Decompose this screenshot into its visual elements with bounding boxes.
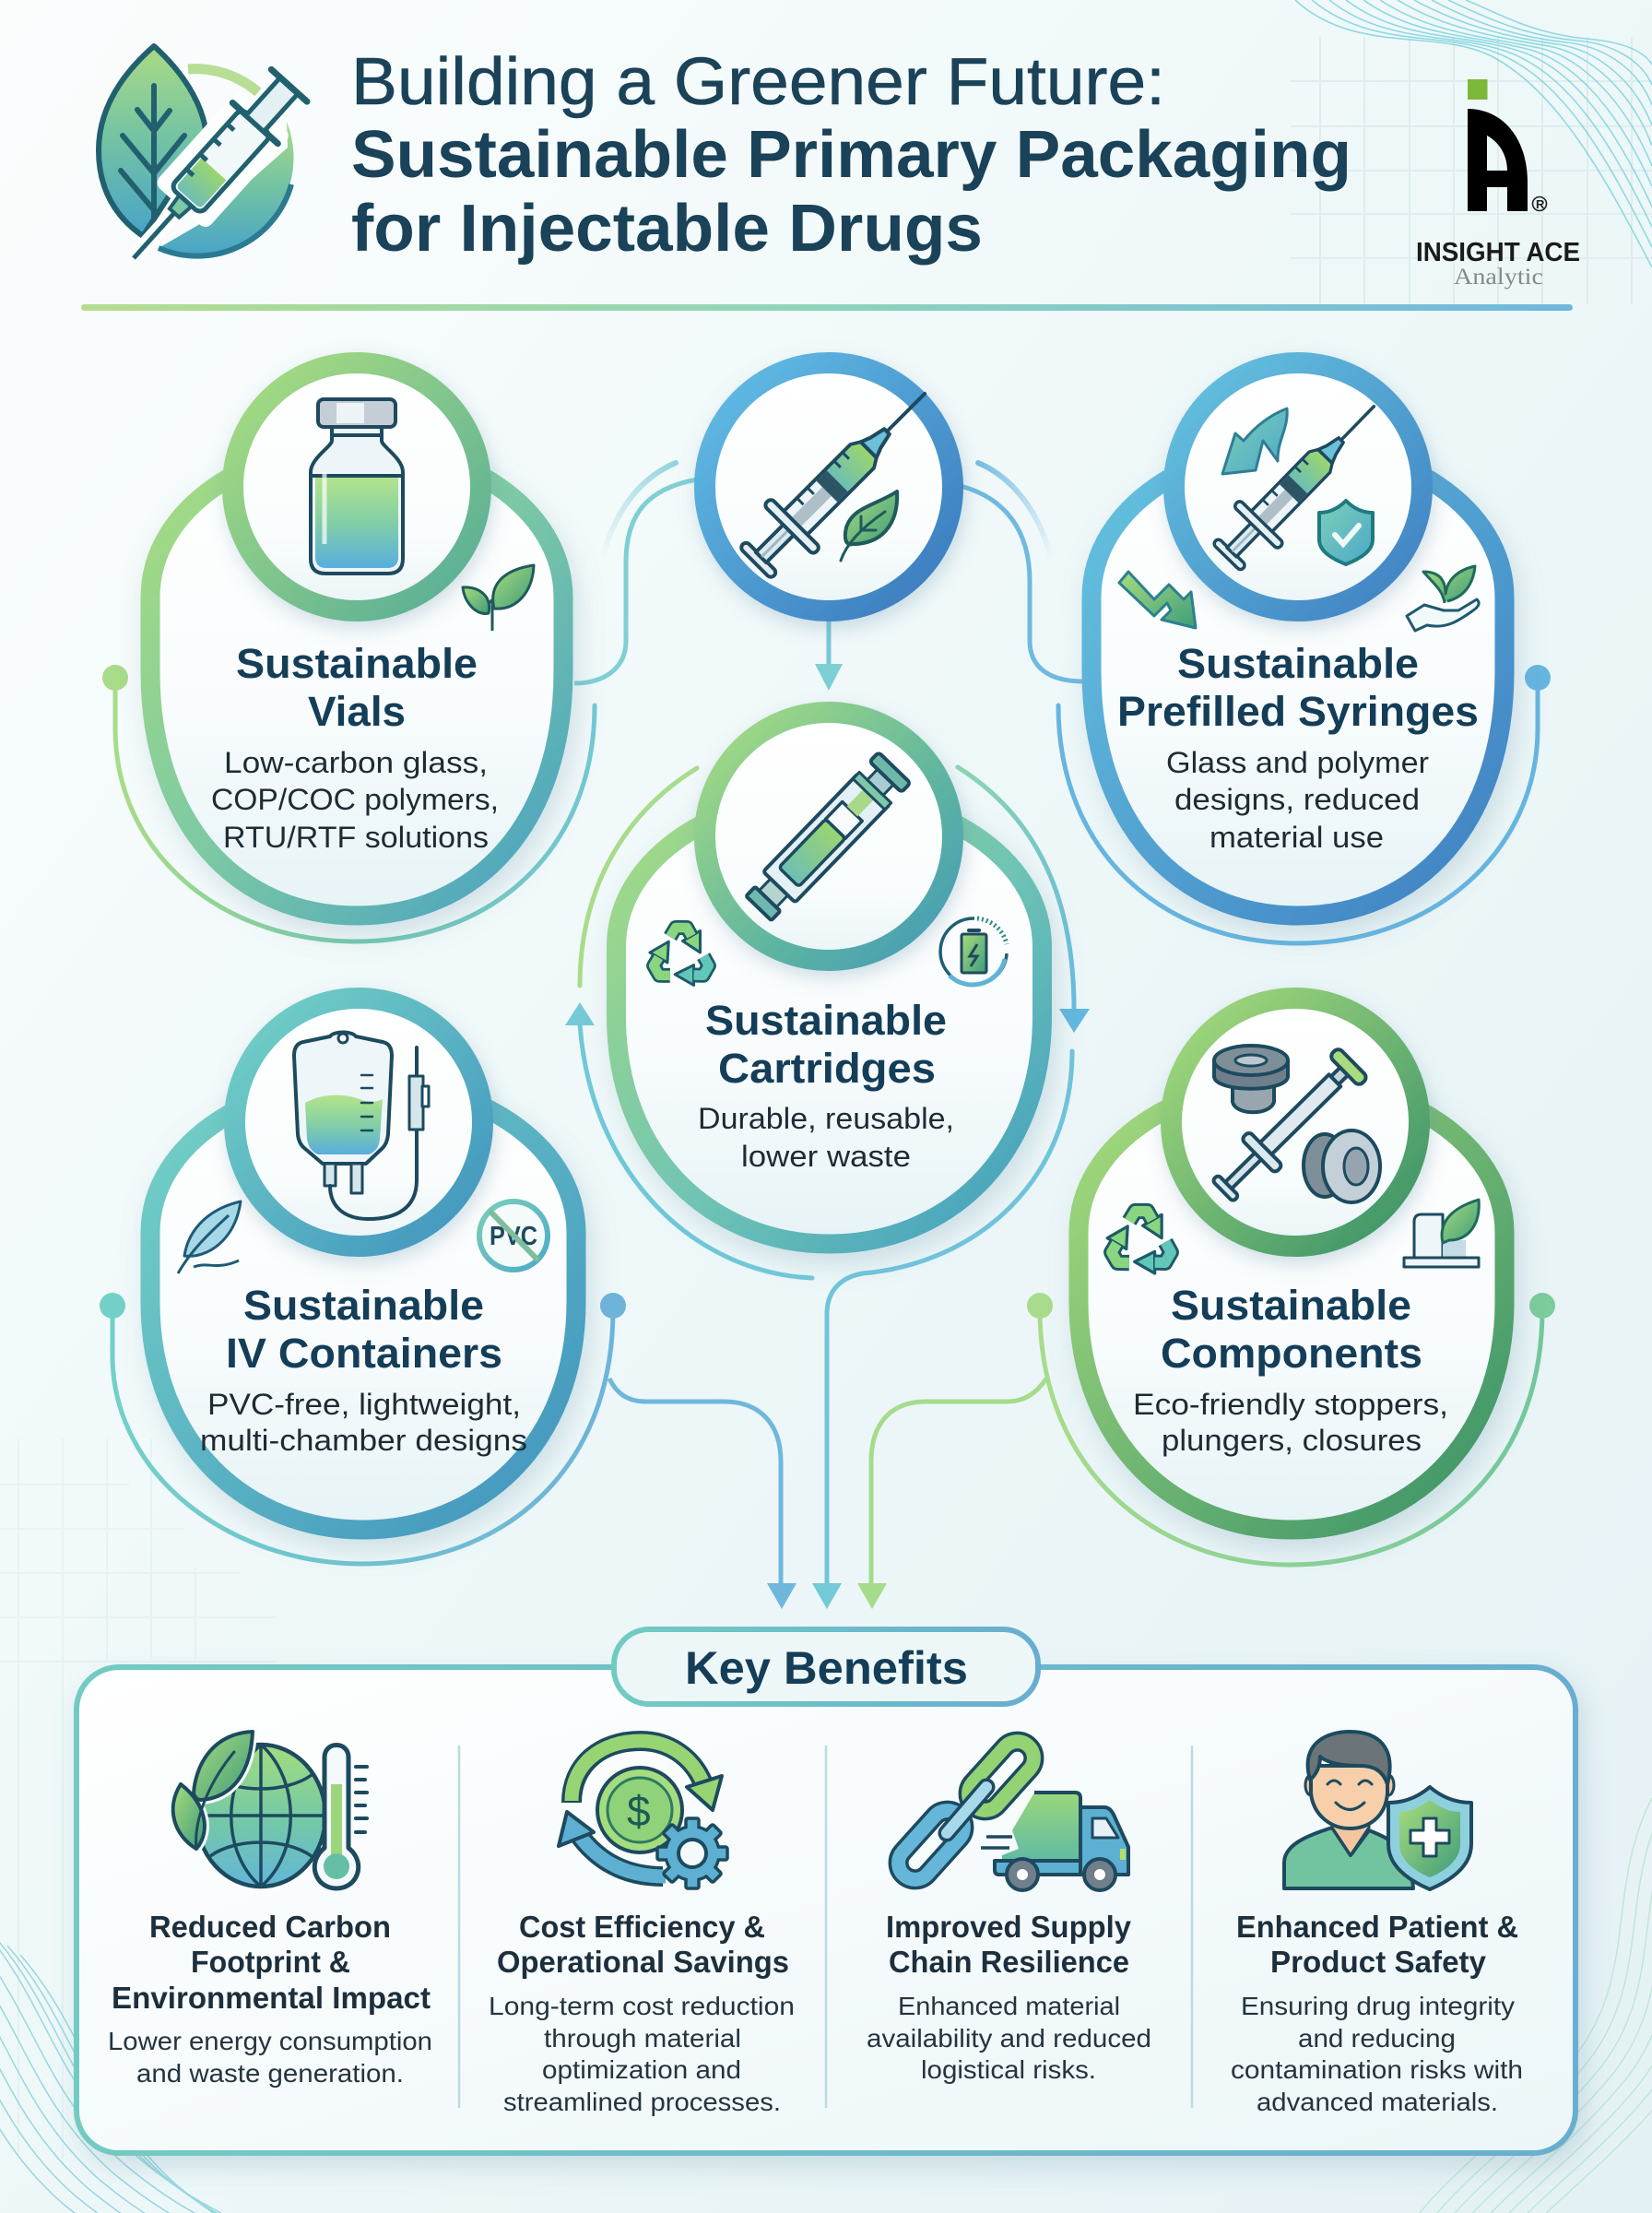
icon: vial bbox=[311, 399, 403, 574]
icon: feather bbox=[178, 1201, 241, 1273]
text: patient safety: contamination risks with bbox=[1231, 2055, 1523, 2084]
syringe bbox=[111, 65, 312, 278]
text: cost efficiency: streamlined processes. bbox=[503, 2088, 781, 2116]
card shape bbox=[1092, 444, 1504, 916]
text: cost efficiency bbox=[489, 1910, 795, 2116]
outer arc: prefilled syringes bbox=[1058, 665, 1551, 943]
text: reduced carbon footprint: Environmental Impact bbox=[112, 1981, 431, 2015]
icon circle bbox=[1171, 998, 1420, 1247]
title bbox=[351, 45, 1351, 266]
bottom-right wave lines bbox=[1420, 1798, 1652, 2213]
icon circle bbox=[704, 363, 953, 610]
text: cartridges: Sustainable bbox=[705, 997, 947, 1044]
text: reduced carbon footprint: and waste generation. bbox=[136, 2059, 404, 2088]
text: supply chain bbox=[867, 1910, 1151, 2084]
text: IV containers: IV Containers bbox=[226, 1330, 502, 1377]
icon: round stopper bbox=[1304, 1130, 1380, 1202]
card shape bbox=[616, 794, 1042, 1244]
text: prefilled syringes: designs, reduced bbox=[1174, 783, 1420, 816]
icon: down trend arrow bbox=[1119, 572, 1196, 628]
arrow: upper right around cartridges bbox=[958, 767, 1090, 1033]
connector: top syringe to vials bbox=[574, 463, 697, 683]
text: patient safety bbox=[1231, 1910, 1523, 2116]
crescent behind syringe bbox=[159, 122, 293, 255]
text: components: plungers, closures bbox=[1162, 1424, 1422, 1457]
text: reduced carbon footprint bbox=[108, 1910, 432, 2088]
text: cartridges: Cartridges bbox=[718, 1045, 936, 1092]
arrow: components to key benefits bbox=[857, 1379, 1046, 1609]
text: supply chain: logistical risks. bbox=[921, 2055, 1096, 2084]
text: patient safety: advanced materials. bbox=[1257, 2088, 1498, 2116]
text: reduced carbon footprint: Lower energy consumption bbox=[108, 2027, 432, 2055]
outer arc: components bbox=[1027, 1293, 1555, 1565]
panel: sustainable IV containers bbox=[150, 998, 576, 1530]
text: prefilled syringes bbox=[1117, 640, 1479, 854]
icon: chain links and truck bbox=[891, 1734, 1128, 1890]
bottom-left wave lines bbox=[0, 1927, 260, 2213]
column dividers bbox=[459, 1746, 1192, 2108]
text: cost efficiency: optimization and bbox=[542, 2055, 741, 2084]
icon: cost cycle, coin and gear: $ bbox=[627, 1787, 651, 1835]
title: Sustainable Primary Packaging bbox=[351, 118, 1351, 192]
title: Building a Greener Future: bbox=[351, 45, 1165, 119]
text: reduced carbon footprint: Footprint & bbox=[191, 1945, 350, 1979]
panel: sustainable prefilled syringes bbox=[1092, 363, 1504, 916]
text: components bbox=[1133, 1282, 1448, 1457]
text: vials: Sustainable bbox=[236, 640, 478, 687]
faint grid bottom left bbox=[0, 1438, 277, 2158]
text: reduced carbon footprint: Reduced Carbon bbox=[149, 1910, 391, 1944]
icon circle bbox=[704, 712, 953, 961]
icon: no PVC bbox=[479, 1201, 548, 1270]
icon: cost cycle, coin and gear bbox=[559, 1741, 727, 1888]
text: vials bbox=[211, 640, 499, 854]
icon: shield bbox=[1319, 501, 1373, 564]
text: supply chain: Enhanced material bbox=[898, 1992, 1120, 2020]
arc: upper left around cartridges bbox=[580, 768, 697, 986]
header icon: leaf and syringe bbox=[99, 46, 312, 278]
icon: reduce arrow bbox=[1222, 408, 1287, 474]
logo: Insight Ace Analytic bbox=[1416, 79, 1580, 290]
card shape bbox=[150, 1080, 576, 1530]
top arc bbox=[188, 69, 258, 92]
arrow: cartridges to key benefits bbox=[812, 1051, 1072, 1609]
panel: key benefits bbox=[77, 1629, 1575, 2153]
panel: sustainable vials bbox=[150, 363, 563, 916]
text: cartridges: Durable, reusable, bbox=[698, 1102, 954, 1135]
panel frame bbox=[77, 1667, 1575, 2153]
panel: sustainable components bbox=[1079, 998, 1504, 1530]
icon circle bbox=[234, 998, 483, 1247]
arrow: top syringe down to cartridges bbox=[815, 618, 843, 691]
text: IV containers: Sustainable bbox=[243, 1282, 484, 1329]
text: cost efficiency: Operational Savings bbox=[497, 1945, 789, 1979]
text: supply chain: availability and reduced bbox=[867, 2024, 1151, 2053]
text: components: Sustainable bbox=[1171, 1282, 1411, 1329]
text: prefilled syringes: material use bbox=[1210, 821, 1384, 854]
title: for Injectable Drugs bbox=[351, 192, 983, 266]
header divider bbox=[81, 304, 1573, 311]
text: prefilled syringes: Sustainable bbox=[1177, 640, 1419, 687]
text: supply chain: Chain Resilience bbox=[889, 1945, 1129, 1979]
arrow: IV containers to key benefits bbox=[609, 1379, 796, 1609]
text: components: Components bbox=[1161, 1330, 1422, 1377]
logo: Insight Ace Analytic: INSIGHT ACE bbox=[1416, 238, 1580, 267]
text: IV containers bbox=[200, 1282, 527, 1457]
icon: battery bbox=[940, 918, 1007, 985]
text: patient safety: Product Safety bbox=[1270, 1945, 1487, 1979]
icon: IV bag bbox=[294, 1033, 429, 1219]
icon: rubber stopper bbox=[1214, 1046, 1288, 1112]
text: cost efficiency: Long-term cost reduction bbox=[489, 1992, 795, 2020]
icon: recycle bbox=[1104, 1212, 1174, 1275]
text: patient safety: Ensuring drug integrity bbox=[1241, 1992, 1515, 2020]
text: vials: Low-carbon glass, bbox=[224, 746, 488, 779]
icon: recycle bbox=[647, 928, 712, 987]
icon: syringe bbox=[1205, 385, 1396, 579]
icon: leaf bbox=[841, 491, 897, 561]
faint grid top right bbox=[1291, 37, 1652, 304]
icon: no PVC: PVC bbox=[490, 1222, 537, 1251]
text: prefilled syringes: Prefilled Syringes bbox=[1117, 688, 1479, 735]
text: vials: Vials bbox=[308, 688, 406, 735]
icon: hand with sprout bbox=[1407, 566, 1479, 631]
text: cartridges: lower waste bbox=[741, 1140, 911, 1173]
icon: syringe bbox=[730, 369, 950, 588]
arrow: up-left around cartridges bbox=[565, 1002, 812, 1278]
icon: globe, leaves and thermometer bbox=[173, 1732, 367, 1888]
heading pill: key benefits: Key Benefits bbox=[685, 1642, 968, 1694]
card shape bbox=[150, 444, 563, 916]
text: cartridges bbox=[698, 997, 954, 1173]
text: prefilled syringes: Glass and polymer bbox=[1166, 746, 1429, 779]
icon: plunger bbox=[1206, 1046, 1370, 1208]
text: components: Eco-friendly stoppers, bbox=[1133, 1388, 1448, 1421]
icon: patient and shield bbox=[1284, 1732, 1471, 1889]
text: cost efficiency: Cost Efficiency & bbox=[519, 1910, 765, 1944]
top-right wave lines bbox=[1295, 0, 1652, 267]
text: vials: COP/COC polymers, bbox=[211, 783, 499, 816]
logo: Insight Ace Analytic: R bbox=[1536, 197, 1545, 211]
text: patient safety: Enhanced Patient & bbox=[1236, 1910, 1518, 1944]
icon: closure with leaf bbox=[1404, 1200, 1479, 1267]
outer arc: vials bbox=[102, 665, 595, 941]
card shape bbox=[1079, 1080, 1504, 1530]
panel: sustainable cartridges bbox=[616, 712, 1042, 1244]
leaf bbox=[99, 46, 206, 236]
icon circle bbox=[1174, 363, 1422, 610]
outer arc: IV containers bbox=[100, 1293, 626, 1564]
heading pill: key benefits bbox=[614, 1629, 1038, 1704]
icon: cartridge pen bbox=[743, 752, 911, 924]
icon: sprout bbox=[463, 565, 534, 631]
panel: top syringe circle bbox=[704, 363, 953, 610]
text: supply chain: Improved Supply bbox=[886, 1910, 1132, 1944]
logo: Insight Ace Analytic: Analytic bbox=[1454, 265, 1543, 290]
text: IV containers: PVC-free, lightweight, bbox=[207, 1388, 521, 1421]
text: cost efficiency: through material bbox=[544, 2024, 741, 2053]
connector: top syringe to prefilled syringes bbox=[961, 463, 1083, 681]
icon circle bbox=[232, 363, 481, 610]
text: vials: RTU/RTF solutions bbox=[223, 821, 489, 854]
text: IV containers: multi-chamber designs bbox=[200, 1424, 527, 1457]
text: patient safety: and reducing bbox=[1298, 2024, 1456, 2053]
